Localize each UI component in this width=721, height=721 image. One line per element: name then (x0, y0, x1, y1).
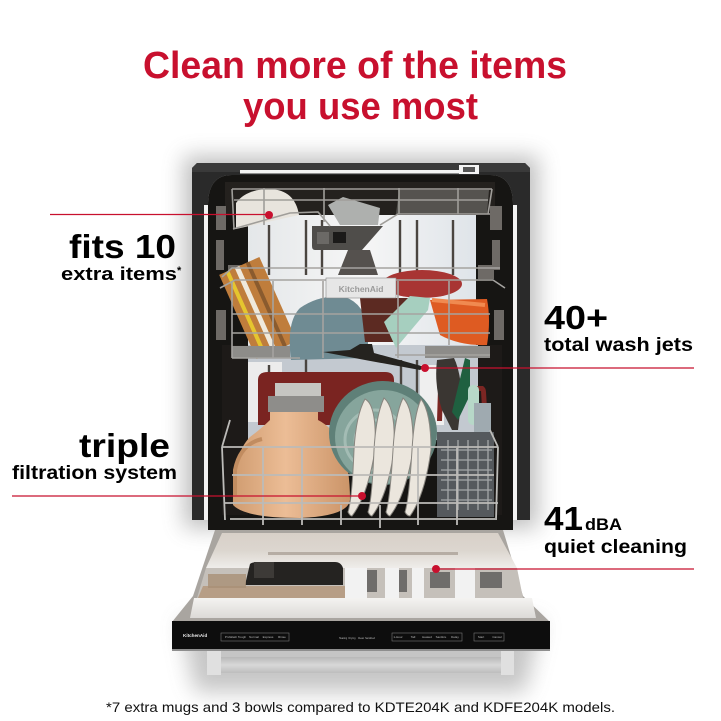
rack wires and label (220, 268, 505, 358)
soft shadow behind dishwasher (180, 156, 542, 692)
cutlery basket (437, 432, 494, 517)
detergent dispenser (245, 562, 343, 585)
utensils (437, 386, 488, 425)
bright rear wall (248, 215, 476, 345)
callout: triple filtration system (12, 427, 366, 500)
callout: 41 dBA quiet cleaning (432, 500, 694, 573)
black frame (192, 163, 530, 520)
open door: KitchenAid (183, 633, 207, 638)
mirror floor (197, 568, 523, 598)
spray arm (323, 344, 425, 370)
callout: 40+ total wash jets (421, 299, 694, 372)
callout: 40+ total wash jets: total wash jets (544, 335, 693, 356)
rack wires (222, 420, 498, 528)
control panel (172, 621, 550, 649)
open door: Normal (249, 635, 259, 639)
striped cutting board (219, 257, 297, 359)
open door: Clean (358, 637, 365, 640)
mint bowl (384, 296, 430, 348)
callout: fits 10 extra items: extra items (61, 264, 177, 284)
blue bowl (290, 296, 368, 360)
third rack (232, 188, 492, 275)
open door: Drying (349, 637, 356, 640)
green platter (329, 381, 437, 485)
callout: fits 10 extra items: fits 10 (69, 228, 176, 265)
open door: Start (478, 635, 484, 639)
tub side machinery (216, 206, 504, 340)
door rim (190, 598, 536, 618)
lower rack (222, 358, 498, 528)
open door: Sanitized (365, 637, 376, 640)
callout: 40+ total wash jets: 40+ (544, 299, 608, 336)
callout: 41 dBA quiet cleaning: dBA (585, 515, 622, 534)
orange mixing bowl (233, 412, 350, 518)
callout: 41 dBA quiet cleaning: quiet cleaning (544, 537, 687, 558)
mixer jar (275, 383, 321, 397)
tines (232, 346, 490, 358)
open door: Cancel (492, 635, 502, 639)
upper rack: KitchenAid (339, 284, 383, 294)
open door: Delay (451, 635, 459, 639)
callout: 41 dBA quiet cleaning: 41 (544, 500, 583, 537)
open door (172, 530, 550, 675)
title (143, 45, 567, 128)
callout: fits 10 extra items: * (177, 265, 182, 277)
spray arm bracket (312, 226, 383, 250)
white plates (348, 398, 431, 516)
bowl (236, 189, 299, 229)
red basket (382, 270, 462, 298)
open door: Heated (422, 635, 432, 639)
upper rack (219, 257, 505, 360)
open door: Sanitize (436, 635, 447, 639)
orange colander (430, 299, 489, 345)
open door: Heating (339, 637, 348, 640)
dark tray (396, 190, 489, 214)
callout: triple filtration system: filtration system (12, 463, 177, 484)
glass (328, 197, 380, 225)
open door: 1-Hour (393, 635, 403, 639)
footnote: *7 extra mugs and 3 bowls compared to KDTE204K and KDFE204K models. (106, 699, 615, 715)
open door: Tall (411, 635, 416, 639)
callout: triple filtration system: triple (79, 427, 170, 464)
door rear well (206, 533, 517, 568)
rack wires (232, 188, 492, 229)
red tray (258, 372, 394, 425)
rear wall vertical rails (269, 220, 453, 395)
title: Clean more of the items (143, 45, 567, 87)
open door: Rinse (278, 635, 286, 639)
open door: ProWash (225, 635, 237, 639)
cavity (208, 175, 513, 530)
handle (207, 651, 221, 675)
dishwasher tub (192, 163, 530, 530)
title: you use most (243, 86, 478, 128)
callout: fits 10 extra items (50, 211, 273, 284)
open door: Tough (238, 635, 246, 639)
open door: Express (263, 635, 274, 639)
door side trim (172, 530, 550, 622)
